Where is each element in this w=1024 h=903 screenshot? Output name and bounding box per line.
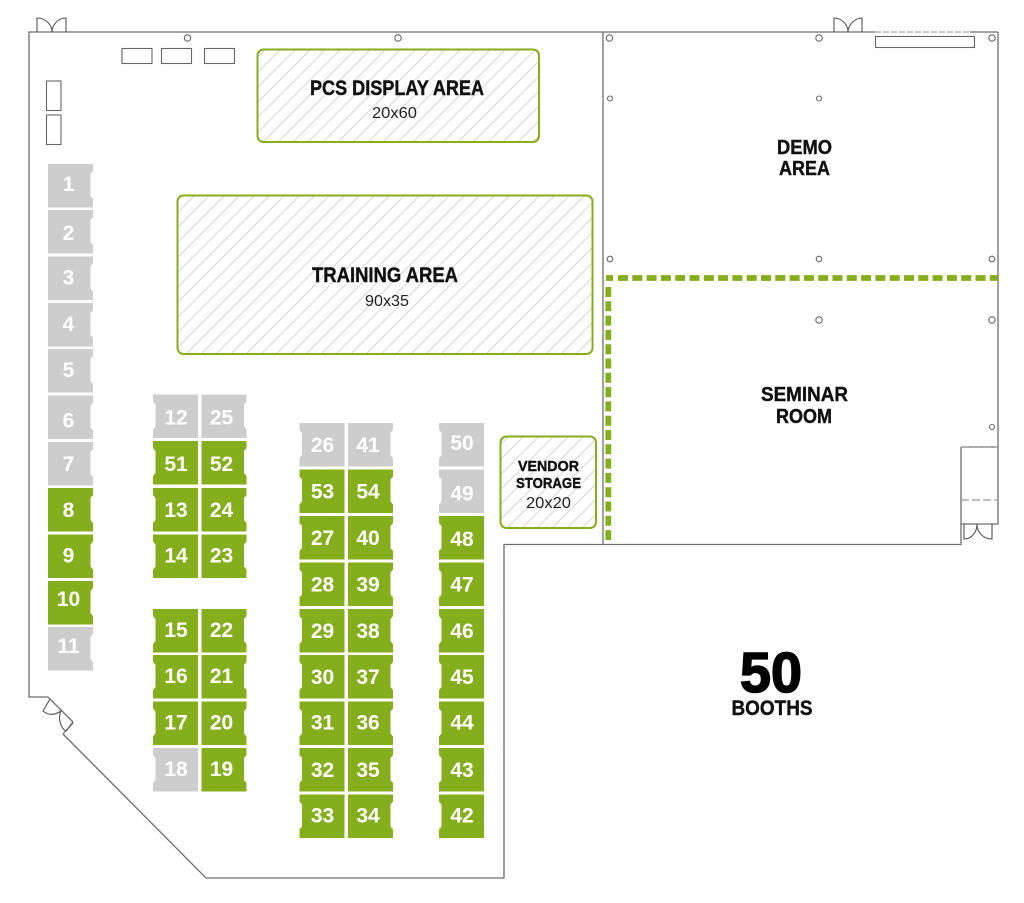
- booth 13: 13: [164, 499, 188, 522]
- booth 21: 21: [210, 665, 233, 688]
- label: seminar room: [761, 384, 849, 428]
- booth 15: [153, 609, 198, 652]
- booth 4: [48, 303, 93, 346]
- booth 25: [202, 394, 246, 438]
- booth 1: [48, 164, 93, 208]
- columns: [184, 35, 995, 430]
- booth 38: 38: [356, 620, 380, 643]
- callout: 50 booths: BOOTHS: [732, 697, 812, 720]
- booth column: 1 to 11: [48, 164, 93, 670]
- booth 19: [202, 748, 246, 792]
- booth 12: 12: [164, 406, 188, 430]
- booth 54: [348, 470, 393, 513]
- booth 45: 45: [450, 666, 474, 689]
- booth 51: [153, 441, 198, 484]
- booth 50: 50: [450, 432, 474, 455]
- booth 21: [202, 655, 246, 698]
- booth 40: [348, 516, 393, 560]
- booth 1: 1: [63, 173, 75, 196]
- booth 20: 20: [210, 712, 233, 734]
- booth 12: [153, 394, 198, 438]
- booth 6: [48, 396, 93, 439]
- booth 2: [48, 210, 93, 254]
- door: top right: [834, 18, 862, 32]
- booth 27: 27: [311, 527, 334, 550]
- booth block: 12 to 14 and 23 to 25, 51, 52: [153, 394, 246, 578]
- booth 35: 35: [356, 759, 380, 782]
- booth 52: [202, 441, 246, 484]
- booth block: 26 to 41, 53, 54: [300, 423, 393, 838]
- door: south west: [43, 699, 73, 731]
- booth 29: [300, 609, 344, 652]
- booth 13: [153, 488, 198, 532]
- callout: 50 booths: 50: [740, 641, 802, 705]
- booth 44: [439, 702, 484, 745]
- booth 9: 9: [63, 544, 74, 568]
- booth 30: [300, 655, 344, 698]
- booth 33: [300, 794, 344, 838]
- booth 14: 14: [164, 544, 188, 568]
- door: top left: [37, 18, 66, 32]
- booth 14: [153, 534, 198, 578]
- dimensions: 90x35: 90x35: [365, 293, 409, 310]
- booth 16: [153, 655, 198, 698]
- booth 47: 47: [450, 574, 474, 596]
- booth 7: 7: [63, 453, 74, 476]
- booth 17: 17: [164, 712, 188, 734]
- booth 3: 3: [63, 266, 74, 290]
- booth 41: 41: [356, 434, 380, 457]
- booth 41: [348, 423, 393, 466]
- booth 10: 10: [57, 588, 80, 611]
- booth 28: 28: [311, 574, 334, 596]
- heading: training area: TRAINING AREA: [312, 264, 458, 287]
- panel: PCS display area: [258, 50, 539, 142]
- booth 44: 44: [450, 712, 474, 734]
- label: demo area: DEMO: [777, 137, 832, 159]
- panel: vendor storage: [500, 436, 596, 528]
- booth 46: [439, 609, 484, 652]
- booth 9: [48, 534, 93, 578]
- booth 27: [300, 516, 344, 560]
- booth 39: 39: [356, 574, 380, 596]
- booth 5: [48, 349, 93, 392]
- booth 23: 23: [210, 544, 233, 568]
- booth 48: 48: [450, 528, 474, 551]
- callout: 50 booths: [732, 641, 812, 720]
- booth 51: 51: [164, 453, 188, 476]
- booth 26: 26: [311, 434, 334, 457]
- booth 16: 16: [164, 665, 188, 688]
- booth 32: 32: [311, 759, 334, 782]
- booth 26: [300, 423, 344, 466]
- panel: training area: [178, 196, 592, 354]
- booth 6: 6: [63, 410, 74, 432]
- booth 38: [348, 609, 393, 652]
- label: seminar room: ROOM: [776, 406, 832, 428]
- booth 4: 4: [63, 313, 75, 336]
- booth 35: [348, 748, 393, 792]
- booth 49: [439, 470, 484, 513]
- booth 19: 19: [210, 758, 233, 781]
- booth 43: [439, 748, 484, 792]
- booth 11: [48, 627, 93, 670]
- booth 50: [439, 423, 484, 466]
- booth 15: 15: [164, 619, 188, 642]
- booth 8: [48, 488, 93, 532]
- booth 31: [300, 702, 344, 745]
- booth 54: 54: [356, 480, 380, 504]
- booth 2: 2: [63, 222, 74, 245]
- booth 25: 25: [210, 406, 233, 430]
- heading: storage: STORAGE: [516, 475, 581, 492]
- booth 3: [48, 256, 93, 300]
- booth block: 15 to 22: [153, 609, 246, 792]
- dimensions: 20x60: 20x60: [372, 105, 417, 122]
- booth 48: [439, 516, 484, 560]
- booth 53: [300, 470, 344, 513]
- booth 39: [348, 562, 393, 606]
- heading: PCS display area: PCS DISPLAY AREA: [310, 77, 484, 100]
- booth 18: [153, 748, 198, 792]
- booth 42: [439, 794, 484, 838]
- booth 17: [153, 702, 198, 745]
- booth 22: 22: [210, 619, 233, 642]
- booth 36: 36: [356, 712, 380, 734]
- label: seminar room: SEMINAR: [761, 384, 849, 406]
- booth 20: [202, 702, 246, 745]
- booth 42: 42: [450, 804, 474, 828]
- booth 34: [348, 794, 393, 838]
- booth 24: 24: [210, 499, 233, 522]
- booth 46: 46: [450, 620, 474, 643]
- booth 29: 29: [311, 620, 334, 643]
- booth 37: 37: [356, 666, 380, 689]
- booth 8: 8: [63, 499, 75, 522]
- booth 23: [202, 534, 246, 578]
- booth 10: [48, 581, 93, 624]
- label: demo area: [777, 137, 832, 180]
- booth 34: 34: [356, 804, 380, 828]
- booth 43: 43: [450, 759, 474, 782]
- booth 7: [48, 442, 93, 486]
- dimensions: 20x20: 20x20: [526, 495, 571, 512]
- booth 24: [202, 488, 246, 532]
- booth 45: [439, 655, 484, 698]
- booth 5: 5: [63, 359, 75, 382]
- booth 18: 18: [164, 758, 188, 781]
- booth 37: [348, 655, 393, 698]
- label: demo area: AREA: [779, 158, 830, 180]
- booth 28: [300, 562, 344, 606]
- booth 30: 30: [311, 666, 334, 689]
- booth 40: 40: [356, 527, 380, 550]
- booth 52: 52: [210, 453, 233, 476]
- booth column: 42 to 50: [439, 423, 484, 838]
- booth 53: 53: [311, 480, 334, 504]
- door: bottom right: [964, 524, 992, 539]
- booth 36: [348, 702, 393, 745]
- booth 49: 49: [450, 482, 474, 506]
- booth 32: [300, 748, 344, 792]
- heading: vendor: VENDOR: [518, 458, 579, 475]
- booth 31: 31: [311, 712, 334, 734]
- wall furniture rectangles: [46, 36, 974, 144]
- green dashed divider: [606, 278, 998, 544]
- booth 47: [439, 562, 484, 606]
- booth 11: 11: [57, 635, 80, 658]
- booth 33: 33: [311, 804, 334, 828]
- booth 22: [202, 609, 246, 652]
